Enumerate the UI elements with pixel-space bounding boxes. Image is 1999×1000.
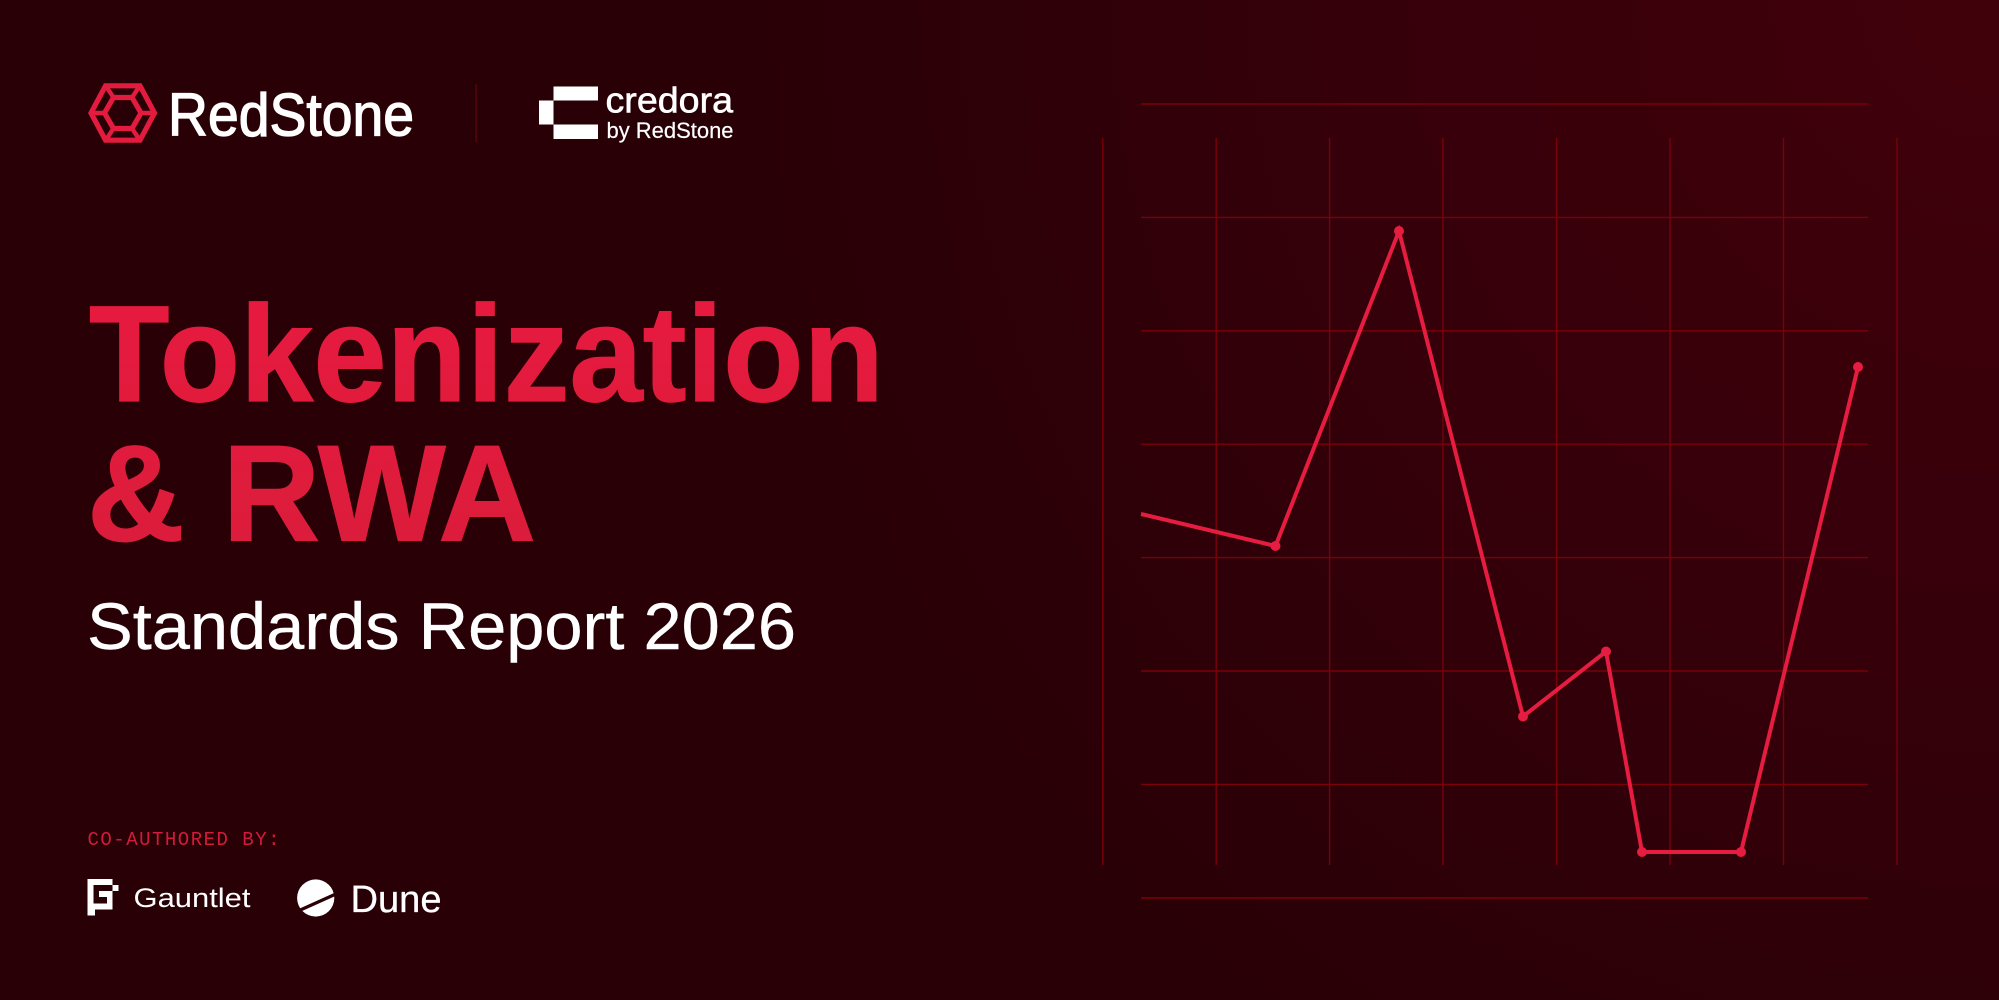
data line: [1141, 231, 1858, 852]
data points: [1270, 226, 1863, 857]
wordmark: RedStone: RedStone: [168, 82, 414, 148]
wordmark: credora: credora: [606, 80, 734, 120]
icon: Dune disc: [297, 879, 337, 917]
logo: Gauntlet: [88, 879, 251, 916]
wordmark: Gauntlet: Gauntlet: [134, 883, 251, 913]
wordmark: by RedStone: by RedStone: [606, 118, 734, 143]
subtitle: Standards Report 2026: [87, 589, 796, 663]
logo: credora by RedStone: [539, 80, 734, 143]
wordmark: Dune: Dune: [350, 879, 442, 921]
separator between logos: [476, 84, 477, 142]
title: Tokenization: Tokenization: [89, 278, 884, 431]
logo: Dune: [297, 879, 442, 921]
line chart: [1103, 104, 1897, 898]
icon: credora bracket: [539, 86, 598, 139]
title: & RWA: & RWA: [87, 418, 536, 570]
logo: RedStone: [90, 82, 414, 148]
chart grid: [1103, 104, 1897, 898]
icon: RedStone hexagon: [90, 86, 155, 140]
co-authored label: CO-AUTHORED BY:: [88, 829, 280, 851]
icon: Gauntlet: [88, 879, 118, 916]
